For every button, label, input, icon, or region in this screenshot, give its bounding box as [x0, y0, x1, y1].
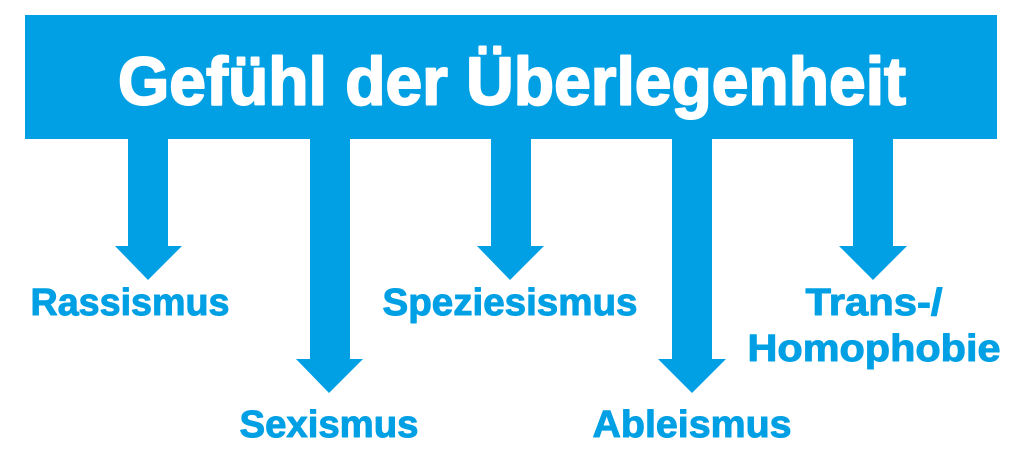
label: Trans-/Homophobie: Homophobie	[748, 328, 1000, 370]
label: Speziesismus: Speziesismus	[382, 282, 638, 324]
label: Trans-/Homophobie	[748, 282, 1000, 370]
label: Ableismus: Ableismus	[592, 404, 792, 446]
arrow: Speziesismus	[477, 139, 544, 280]
label: Trans-/Homophobie: Trans-/	[806, 282, 943, 324]
arrow: Sexismus	[296, 139, 363, 393]
label: Sexismus: Sexismus	[240, 404, 418, 446]
arrow: Trans-/Homophobie	[839, 139, 907, 280]
header banner: Gefühl der Überlegenheit	[118, 44, 906, 120]
header banner	[25, 15, 997, 139]
arrow: Ableismus	[658, 139, 726, 393]
label: Rassismus: Rassismus	[30, 282, 230, 324]
arrow: Rassismus	[115, 139, 182, 280]
